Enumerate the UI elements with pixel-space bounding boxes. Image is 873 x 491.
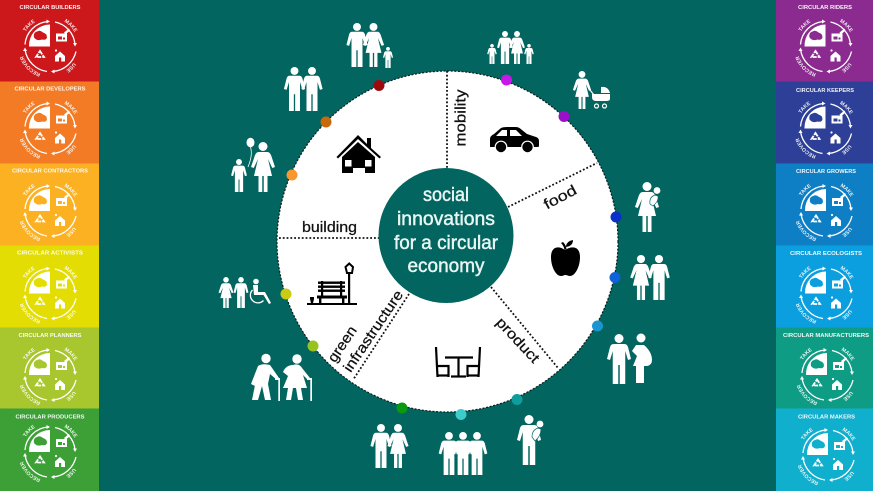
ring dots	[280, 74, 622, 420]
panel: circular planners: USE	[66, 392, 76, 402]
panel: circular planners: MAKE	[64, 347, 78, 361]
label: mobility: mobility	[454, 89, 470, 146]
people: two men	[284, 67, 323, 111]
panel: circular builders: TAKE	[22, 19, 35, 31]
panel: circular activists	[0, 246, 99, 328]
panel: circular makers: USE	[842, 470, 855, 482]
panel: circular makers: CIRCULAR MAKERS	[798, 414, 855, 420]
panel: circular contractors: CIRCULAR CONTRACTORS	[12, 168, 88, 174]
panel: circular producers: RECOVER	[20, 461, 40, 482]
panel: circular builders: RECOVER	[20, 56, 40, 77]
panel: circular activists: TAKE	[22, 266, 35, 278]
panel: circular keepers: RECOVER	[796, 138, 816, 159]
panel: circular developers: MAKE	[64, 100, 78, 114]
panel: circular planners: TAKE	[22, 348, 35, 360]
panel: circular keepers	[776, 82, 873, 164]
icon: car	[490, 127, 539, 153]
people: man and woman	[370, 424, 409, 468]
people: woman and man	[630, 255, 670, 300]
panel: circular builders: USE	[66, 63, 76, 73]
people: man and pregnant woman	[607, 334, 652, 384]
panel: circular ecologists: USE	[842, 310, 852, 320]
panel: circular riders: USE	[842, 63, 852, 73]
panel: circular activists: CIRCULAR ACTIVISTS	[17, 250, 83, 256]
panel: circular keepers: TAKE	[798, 101, 810, 113]
panel: circular ecologists: RECOVER	[796, 302, 816, 324]
panel: circular builders: CIRCULAR BUILDERS	[20, 5, 81, 11]
people: man carrying baby	[517, 415, 543, 465]
panel: circular manufacturers: USE	[841, 390, 854, 402]
icon: apple	[551, 240, 580, 276]
panel: circular contractors: MAKE	[64, 183, 78, 197]
panel: circular growers: USE	[842, 228, 852, 238]
people: three men	[439, 432, 487, 475]
panel: circular riders: RECOVER	[796, 56, 816, 77]
panel: circular manufacturers	[776, 328, 873, 408]
central circle: economy	[408, 256, 485, 277]
panel: circular makers: TAKE	[800, 427, 815, 441]
label: product: product	[492, 315, 542, 367]
icon: table and chairs	[436, 347, 480, 377]
panel: circular activists: RECOVER	[20, 302, 40, 324]
panel: circular producers: MAKE	[64, 424, 78, 438]
central circle: social	[423, 185, 469, 206]
panel: circular growers: MAKE	[840, 183, 854, 197]
panel: circular makers: MAKE	[841, 427, 856, 442]
panel: circular producers: CIRCULAR PRODUCERS	[16, 414, 85, 420]
panel: circular riders: MAKE	[840, 18, 854, 32]
panel: circular contractors: RECOVER	[20, 220, 40, 242]
panel: circular developers: USE	[66, 145, 76, 155]
panel: circular riders: CIRCULAR RIDERS	[798, 5, 852, 11]
people: woman carrying baby	[635, 182, 660, 232]
panel: circular manufacturers: RECOVER	[796, 383, 818, 406]
icon: park bench and lamp	[307, 264, 357, 305]
panel: circular growers: TAKE	[798, 184, 811, 196]
label: infrastructure: infrastructure	[341, 288, 407, 375]
panel: circular producers: USE	[66, 468, 76, 478]
panel: circular keepers: USE	[842, 145, 852, 155]
panel: circular developers: TAKE	[22, 101, 35, 113]
people: elderly couple with canes	[251, 354, 312, 401]
people: woman, child and balloon	[231, 138, 275, 192]
panel: circular makers: RECOVER	[797, 463, 819, 486]
panel: circular ecologists: TAKE	[798, 266, 811, 278]
panel: circular manufacturers: TAKE	[799, 347, 814, 361]
panel: circular producers	[0, 408, 99, 491]
panel: circular growers: RECOVER	[796, 220, 816, 242]
panel: circular planners	[0, 328, 99, 408]
panel: circular activists: MAKE	[64, 266, 78, 280]
panel: circular planners: RECOVER	[20, 384, 40, 406]
panel: circular activists: USE	[66, 310, 76, 320]
icon: house	[336, 135, 381, 173]
panel: circular manufacturers: MAKE	[840, 347, 855, 362]
panel: circular riders	[776, 0, 873, 82]
panel: circular manufacturers: CIRCULAR MANUFACTURERS	[783, 333, 869, 339]
people: woman with pram	[573, 71, 610, 109]
panel: circular keepers: CIRCULAR KEEPERS	[796, 88, 854, 94]
panel: circular developers: RECOVER	[20, 138, 40, 159]
people: family with one child	[346, 23, 393, 68]
wheel disc	[277, 71, 618, 412]
central circle: innovations	[397, 209, 495, 230]
label: food: food	[541, 183, 580, 213]
panel: circular builders	[0, 0, 99, 82]
panel: circular keepers: MAKE	[840, 100, 854, 114]
panel: circular growers	[776, 164, 873, 246]
panel: circular ecologists: CIRCULAR ECOLOGISTS	[790, 251, 862, 257]
central circle: for a circular	[394, 233, 499, 254]
panel: circular ecologists: MAKE	[840, 266, 854, 280]
panel: circular growers: CIRCULAR GROWERS	[796, 169, 856, 175]
central circle	[378, 168, 514, 303]
panel: circular developers	[0, 82, 99, 164]
panel: circular ecologists	[776, 246, 873, 328]
panel: circular contractors: TAKE	[22, 184, 35, 196]
panel: circular riders: TAKE	[798, 19, 810, 31]
panel: circular producers: TAKE	[22, 424, 35, 436]
panel: circular developers: CIRCULAR DEVELOPERS	[14, 86, 86, 92]
panel: circular planners: CIRCULAR PLANNERS	[18, 333, 82, 339]
panel: circular makers	[776, 408, 873, 491]
label: building: building	[302, 220, 357, 236]
label: green: green	[325, 324, 361, 366]
people: family with two children	[487, 31, 534, 64]
panel: circular builders: MAKE	[64, 18, 78, 32]
panel: circular contractors	[0, 164, 99, 246]
people: two adults and wheelchair user	[219, 277, 271, 308]
panel: circular contractors: USE	[66, 228, 76, 238]
